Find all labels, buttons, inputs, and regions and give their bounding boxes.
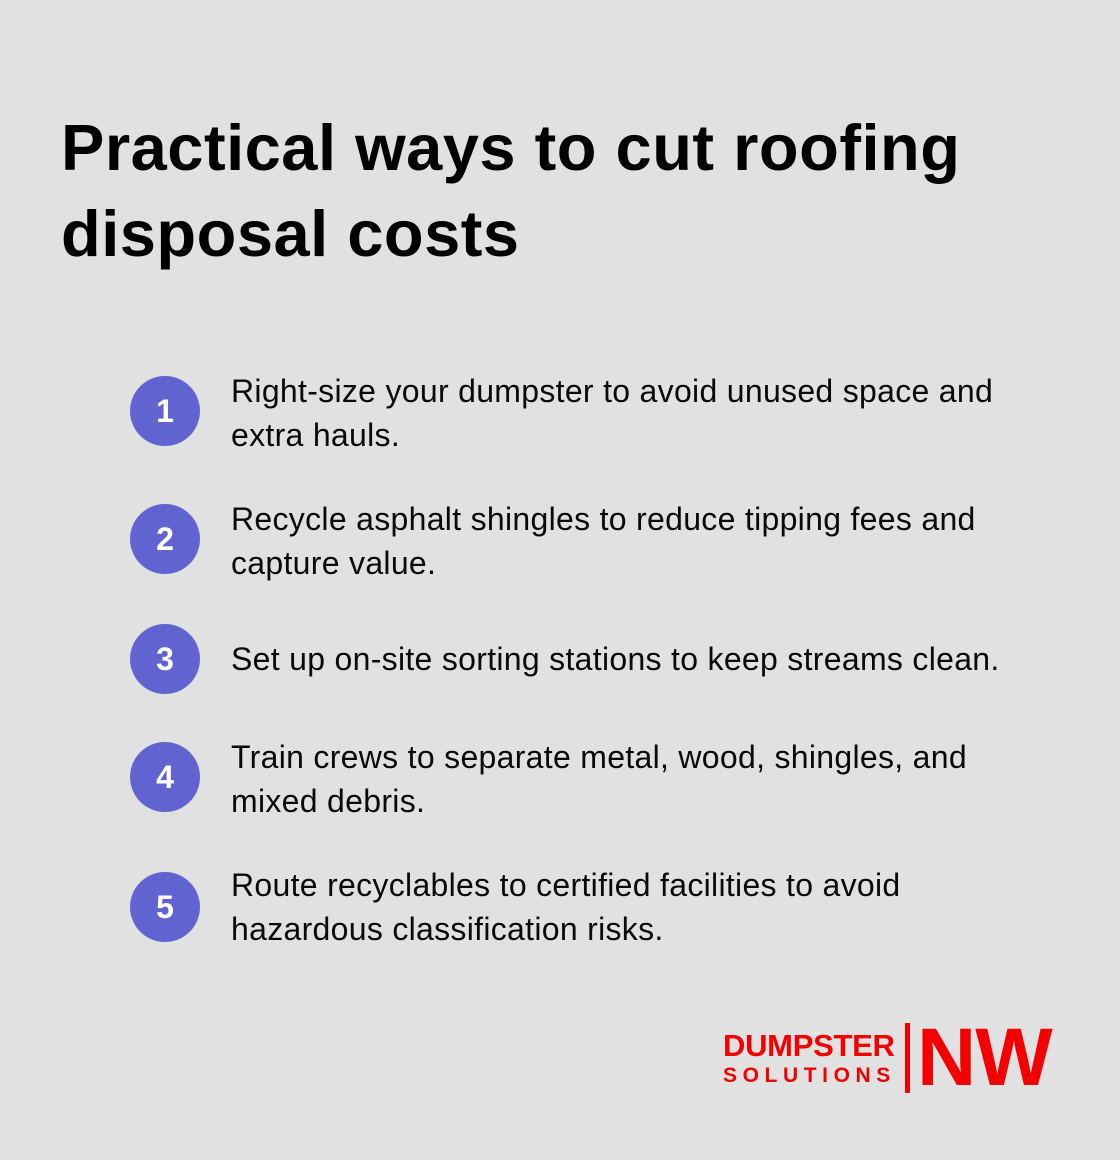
item 1 xyxy=(130,373,993,453)
title xyxy=(61,111,960,270)
icon: number 2 xyxy=(130,504,200,574)
logo xyxy=(723,1012,1052,1103)
icon: number 5 xyxy=(130,872,200,942)
logo: NW xyxy=(917,1012,1052,1103)
text 3: Set up on-site sorting stations to keep streams clean. xyxy=(231,641,1000,677)
icon: number 1 xyxy=(130,376,200,446)
logo: DUMPSTER xyxy=(723,1028,895,1063)
icon: number 5: 5 xyxy=(156,889,174,925)
text 2: capture value. xyxy=(231,545,436,581)
text 4 xyxy=(231,739,967,819)
icon: number 3: 3 xyxy=(156,641,174,677)
icon: number 4: 4 xyxy=(156,759,174,795)
text 1 xyxy=(231,373,993,453)
text 1: extra hauls. xyxy=(231,417,400,453)
icon: number 2: 2 xyxy=(156,521,174,557)
title: Practical ways to cut roofing xyxy=(61,111,960,184)
item 2 xyxy=(130,501,976,581)
icon: number 3 xyxy=(130,624,200,694)
icon: number 1: 1 xyxy=(156,393,174,429)
text 4: Train crews to separate metal, wood, shingles, and xyxy=(231,739,967,775)
text 1: Right-size your dumpster to avoid unused space and xyxy=(231,373,993,409)
text 2: Recycle asphalt shingles to reduce tipping fees and xyxy=(231,501,976,537)
item 5 xyxy=(130,867,901,947)
text 5: Route recyclables to certified facilities to avoid xyxy=(231,867,901,903)
item 3 xyxy=(130,624,1000,694)
title: disposal costs xyxy=(61,197,520,270)
text 2 xyxy=(231,501,976,581)
icon: number 4 xyxy=(130,742,200,812)
logo: SOLUTIONS xyxy=(723,1064,896,1087)
text 5 xyxy=(231,867,901,947)
text 5: hazardous classification risks. xyxy=(231,911,664,947)
item 4 xyxy=(130,739,967,819)
text 4: mixed debris. xyxy=(231,783,425,819)
